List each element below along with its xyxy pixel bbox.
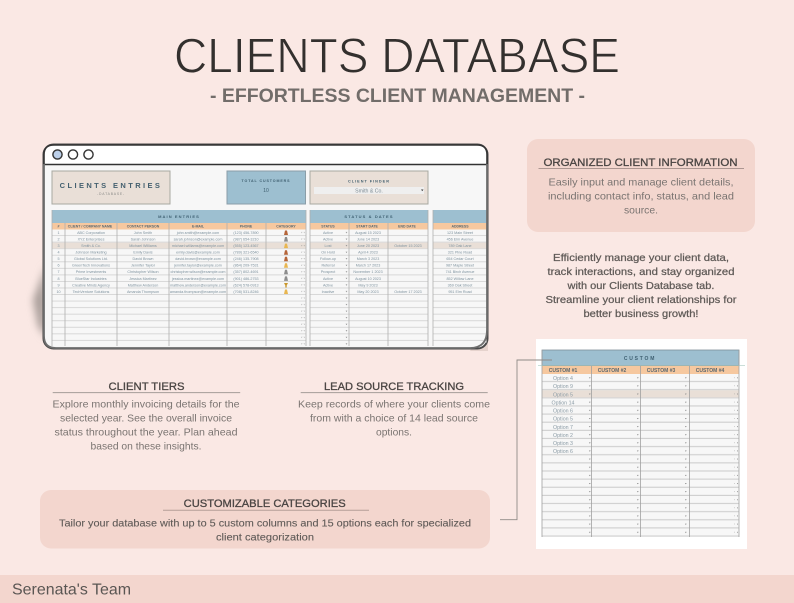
main entries table: Jennifer Taylor xyxy=(131,264,156,268)
custom table card: CUSTOM #4 xyxy=(696,368,724,374)
status and dates table: Inactive xyxy=(322,290,334,294)
intro paragraph: better business growth! xyxy=(584,308,698,320)
status and dates table: Follow-up xyxy=(320,257,336,261)
address table: 123 Main Street xyxy=(447,231,473,235)
address table: 789 Oak Lane xyxy=(448,244,472,248)
status and dates table: Active xyxy=(323,231,333,235)
total customers box: 10 xyxy=(263,188,269,194)
address table: 369 Oak Street xyxy=(448,283,472,287)
custom table card: CUSTOM #1 xyxy=(549,368,577,374)
address table: 987 Maple Street xyxy=(446,264,474,268)
main entries table: ABC Corporation xyxy=(77,231,105,235)
custom table card: CUSTOM #3 xyxy=(647,368,675,374)
main entries table: christopher.wilson@example.com xyxy=(171,270,225,274)
client tiers body: status throughout the year. Plan ahead xyxy=(54,426,238,438)
custom table card: Option 7 xyxy=(553,425,573,431)
status and dates table xyxy=(310,210,428,346)
main entries table: PHONE xyxy=(240,225,253,229)
intro paragraph: with our Clients Database tab. xyxy=(566,280,714,292)
main entries table: Amanda Thompson xyxy=(127,290,159,294)
custom table card: Option 6 xyxy=(553,408,573,414)
subtitle: - EFFORTLESS CLIENT MANAGEMENT - xyxy=(210,85,585,107)
main entries table: BlueStar Industries xyxy=(75,277,107,281)
main entries table: (123) 456-7890 xyxy=(233,231,259,235)
main entries table: (246) 135-7908 xyxy=(233,257,259,261)
main entries table: 2 xyxy=(57,238,60,242)
main entries table: David Brown xyxy=(133,257,153,261)
main entries table: matthew.anderson@example.com xyxy=(170,283,226,287)
custom table card xyxy=(536,339,747,549)
main entries table: (901) 486-2753 xyxy=(233,277,259,281)
address table: 852 Willow Lane xyxy=(446,277,474,281)
status and dates table: Lost xyxy=(325,244,331,248)
main entries table: emily.davis@example.com xyxy=(176,251,220,255)
status and dates table: August 15 2023 xyxy=(355,231,381,235)
status and dates table: March 3 2023 xyxy=(357,257,379,261)
address table: 456 Elm Avenue xyxy=(447,238,473,242)
status and dates table: STATUS xyxy=(321,225,335,229)
main entries table: Johnson Marketing xyxy=(75,251,107,255)
section: lead source tracking: LEAD SOURCE TRACKING xyxy=(324,381,464,393)
customizable body: client categorization xyxy=(216,532,314,544)
custom table card: Option 14 xyxy=(552,400,575,406)
main entries table: MAIN ENTRIES xyxy=(158,214,200,219)
status and dates table: STATUS & DATES xyxy=(344,214,394,219)
section: client tiers xyxy=(52,381,240,452)
main entries table xyxy=(52,210,306,346)
main entries table: Smith & Co. xyxy=(81,244,101,248)
intro paragraph: Efficiently manage your client data, xyxy=(553,252,729,264)
organized body text: Easily input and manage client details, xyxy=(548,177,734,189)
intro paragraph: Streamline your client relationships for xyxy=(546,294,737,306)
main entries table: 3 xyxy=(57,244,60,248)
custom table card: Option 5 xyxy=(553,392,573,398)
clients entries box: CLIENTS ENTRIES xyxy=(60,181,162,190)
total customers box xyxy=(227,171,306,204)
status and dates table: Active xyxy=(323,238,333,242)
status and dates table: June 20 2023 xyxy=(357,244,379,248)
main entries table: 5 xyxy=(57,257,60,261)
lead source body: options. xyxy=(376,426,412,438)
main entries table: # xyxy=(58,225,60,229)
address table: 951 Elm Road xyxy=(448,290,472,294)
panel: customizable categories xyxy=(40,490,490,548)
custom table card: CUSTOM xyxy=(624,356,656,362)
main entries table: 9 xyxy=(57,283,60,287)
status and dates table: June 14 2023 xyxy=(357,238,379,242)
custom table card: Option 9 xyxy=(553,384,573,390)
client finder box: Smith & Co. xyxy=(355,188,383,194)
client finder box xyxy=(310,171,428,204)
main entries table: Christopher Wilson xyxy=(127,270,159,274)
main entries table: Sarah Johnson xyxy=(131,238,155,242)
custom table card: Option 6 xyxy=(553,449,573,455)
spreadsheet window xyxy=(44,144,488,348)
address table: 741 Birch Avenue xyxy=(446,270,474,274)
clients entries box xyxy=(52,171,170,204)
main entries table: (357) 802-4691 xyxy=(233,270,259,274)
customizable body: Tailor your database with up to 5 custom columns and 15 options each for specialized xyxy=(59,518,471,530)
client tiers body: based on these insights. xyxy=(90,440,202,452)
status and dates table: On Hold xyxy=(321,251,335,255)
status and dates table: August 10 2023 xyxy=(355,277,381,281)
address table: 321 Pine Road xyxy=(448,251,472,255)
status and dates table: Referral xyxy=(321,264,335,268)
status and dates table: May 9 2023 xyxy=(358,283,378,287)
client tiers body xyxy=(52,398,240,452)
window frame xyxy=(44,144,488,348)
lead source body: from with a choice of 14 lead source xyxy=(310,412,478,424)
main entries table: 8 xyxy=(57,277,60,281)
main entries table: jennifer.taylor@example.com xyxy=(173,264,222,268)
main entries table: jessica.martinez@example.com xyxy=(171,277,224,281)
status and dates table: April 4 2023 xyxy=(358,251,378,255)
title: CLIENTS DATABASE xyxy=(174,30,620,84)
category icons xyxy=(284,230,288,294)
main entries table: CATEGORY xyxy=(276,225,296,229)
main entries table: (864) 209-7531 xyxy=(233,264,259,268)
main entries table: TechVenture Solutions xyxy=(73,290,109,294)
footer band xyxy=(0,575,794,603)
address table: 654 Cedar Court xyxy=(446,257,474,261)
main entries table: (555) 123-4567 xyxy=(233,244,259,248)
client tiers body: Explore monthly invoicing details for the xyxy=(52,398,240,410)
panel: organized client information: ORGANIZED CLIENT INFORMATION xyxy=(544,157,738,169)
address table xyxy=(433,210,486,346)
main entries table: amanda.thompson@example.com xyxy=(170,290,226,294)
panel: organized client information xyxy=(527,139,755,232)
footer band: Serenata's Team xyxy=(12,582,131,598)
main entries table: Creative Minds Agency xyxy=(72,283,110,287)
main entries table: (789) 321-6540 xyxy=(233,251,259,255)
main entries table: John Smith xyxy=(134,231,152,235)
section: lead source tracking xyxy=(298,381,490,438)
customizable body xyxy=(59,518,471,544)
status and dates table: November 1 2023 xyxy=(353,270,383,274)
main entries table: Emily Davis xyxy=(133,251,153,255)
main entries table: michael.williams@example.com xyxy=(172,244,224,248)
main entries table: Global Solutions Ltd. xyxy=(74,257,108,261)
main entries table: (624) 578-0913 xyxy=(233,283,259,287)
window shadow xyxy=(33,265,46,338)
panel: customizable categories: CUSTOMIZABLE CATEGORIES xyxy=(184,498,346,510)
status and dates table: October 17 2023 xyxy=(394,290,422,294)
status and dates table: START DATE xyxy=(356,225,378,229)
main entries table: david.brown@example.com xyxy=(175,257,221,261)
custom table card: CUSTOM #2 xyxy=(598,368,626,374)
section: client tiers: CLIENT TIERS xyxy=(108,381,184,393)
lead source body xyxy=(298,398,490,438)
client finder box: CLIENT FINDER xyxy=(348,180,390,184)
status and dates table: May 20 2023 xyxy=(357,290,379,294)
lead source body: Keep records of where your clients come xyxy=(298,398,490,410)
main entries table: (708) 531-8246 xyxy=(233,290,259,294)
window buttons xyxy=(53,150,93,159)
window outline overlay xyxy=(44,164,487,348)
status and dates table: Prospect xyxy=(321,270,335,274)
intro paragraph: track interactions, and stay organized xyxy=(548,266,735,278)
total customers box: TOTAL CUSTOMERS xyxy=(242,179,290,183)
main entries table: 6 xyxy=(57,264,60,268)
custom table card: Option 2 xyxy=(553,433,573,439)
status and dates table: END DATE xyxy=(398,225,416,229)
window corner shadow xyxy=(470,322,488,351)
client tiers body: selected year. See the overall invoice xyxy=(60,412,232,424)
custom table card: Option 3 xyxy=(553,441,573,447)
main entries table: Michael Williams xyxy=(129,244,157,248)
custom table card: Option 5 xyxy=(553,417,573,423)
organized body text: including contact info, status, and lead xyxy=(548,191,734,203)
main entries table: CONTACT PERSON xyxy=(127,225,160,229)
custom table card: Option 4 xyxy=(553,376,573,382)
main entries table: Prime Investments xyxy=(76,270,106,274)
main entries table: E-MAIL xyxy=(192,225,205,229)
main entries table: Matthew Anderson xyxy=(128,283,158,287)
main entries table: 1 xyxy=(57,231,60,235)
main entries table: 7 xyxy=(57,270,60,274)
connector arrow xyxy=(500,360,552,520)
intro paragraph xyxy=(546,252,737,320)
main entries table: XYZ Enterprises xyxy=(78,238,105,242)
status and dates table: March 17 2023 xyxy=(356,264,380,268)
status and dates table: October 15 2023 xyxy=(394,244,422,248)
main entries table: GreenTech Innovations xyxy=(72,264,110,268)
organized body text xyxy=(548,177,734,217)
clients entries box: -DATABASE- xyxy=(97,192,125,196)
main entries table: 10 xyxy=(56,290,61,294)
status and dates table: Active xyxy=(323,283,333,287)
main entries table: CLIENT / COMPANY NAME xyxy=(68,225,113,229)
main entries table: john.smith@example.com xyxy=(176,231,219,235)
address table: ADDRESS xyxy=(451,225,469,229)
main entries table: 4 xyxy=(57,251,60,255)
organized body text: source. xyxy=(624,205,658,217)
status and dates table: Active xyxy=(323,277,333,281)
window title bar xyxy=(44,145,487,164)
main entries table: (987) 654-3210 xyxy=(233,238,259,242)
main entries table: sarah.johnson@example.com xyxy=(174,238,222,242)
main entries table: Jessica Martinez xyxy=(129,277,157,281)
